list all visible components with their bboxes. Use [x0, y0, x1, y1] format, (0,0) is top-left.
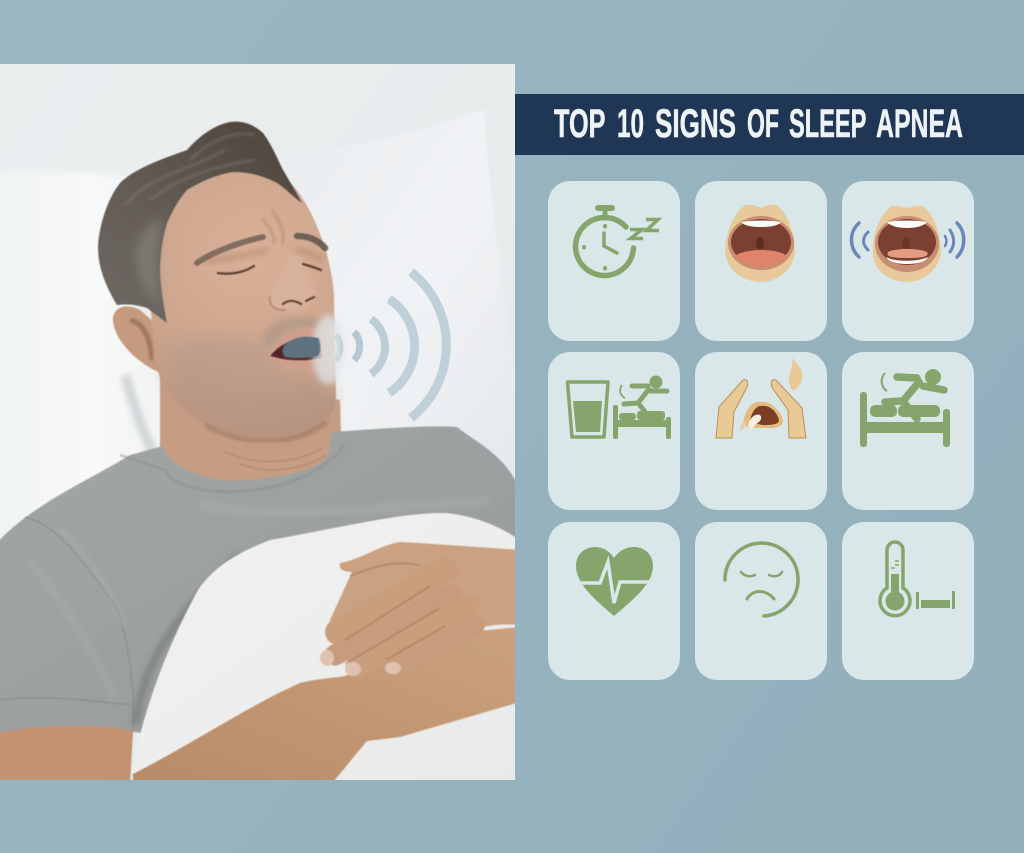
heading: SLEEP	[789, 102, 866, 146]
eye socket shadow	[205, 250, 322, 262]
heading: APNEA	[876, 102, 963, 146]
under-chin crease	[205, 422, 327, 442]
icon: bed and running person	[860, 369, 950, 447]
head shadow on pillow	[125, 375, 160, 465]
icon: open mouth	[725, 205, 795, 282]
upper hand	[330, 542, 520, 670]
hair strands	[125, 134, 255, 205]
panel: card 1, stopwatch with zzz	[548, 181, 680, 341]
icon: glass of water	[568, 382, 608, 437]
forehead frown	[262, 210, 284, 244]
panel: card 4, water glass and bed	[548, 352, 680, 510]
icon: heart	[576, 547, 653, 616]
panel: card 2, open mouth	[695, 181, 827, 341]
ear	[112, 306, 159, 372]
panel: card 6, person leaving bed	[842, 352, 974, 510]
icon: hands	[716, 380, 806, 438]
stubble shading	[173, 336, 341, 420]
right pillow	[337, 128, 492, 418]
icon: sound waves	[852, 223, 964, 257]
panel: photo of man snoring in bed	[0, 64, 530, 785]
heading: 10	[617, 102, 644, 146]
eyebrows	[197, 237, 263, 263]
icon: dry mouth	[740, 402, 783, 431]
title banner	[515, 94, 1024, 155]
forearm and hands	[133, 542, 520, 785]
blanket	[140, 512, 515, 740]
panel: card 9, thermometer and bed	[842, 522, 974, 680]
moustache shadow	[262, 317, 320, 350]
heading: SIGNS	[655, 102, 736, 146]
icon: sad face	[725, 543, 798, 616]
heading: TOP	[554, 102, 605, 146]
icon: pulse line	[576, 562, 652, 603]
icon: heat wisp	[789, 358, 802, 390]
icon: zzz	[630, 220, 659, 238]
t-shirt	[0, 426, 520, 740]
panel: card 7, heart with pulse	[548, 522, 680, 680]
icon: stopwatch	[576, 208, 634, 276]
icon: small bed	[916, 591, 955, 609]
open mouth lips	[269, 328, 310, 360]
panel: card 3, snoring mouth	[842, 181, 974, 341]
upper arm	[0, 726, 133, 785]
icon: snoring mouth	[873, 206, 941, 282]
neck folds	[225, 448, 325, 470]
panel: card 8, sad sleepy face	[695, 522, 827, 680]
man's neck	[159, 376, 342, 482]
snore mist cone	[320, 310, 336, 390]
face	[149, 165, 336, 470]
left pillow	[10, 174, 160, 528]
panel: card 5, hands and dry mouth	[695, 352, 827, 510]
heading: OF	[747, 102, 779, 146]
closed eyes	[218, 266, 254, 274]
sound wave arcs	[336, 272, 446, 418]
icon: person leaving bed	[613, 376, 671, 439]
icon: thermometer	[880, 542, 910, 616]
grey temple hair	[135, 218, 163, 305]
hair	[98, 122, 302, 323]
snore mist and mouth air	[283, 316, 344, 384]
nose	[275, 262, 312, 308]
